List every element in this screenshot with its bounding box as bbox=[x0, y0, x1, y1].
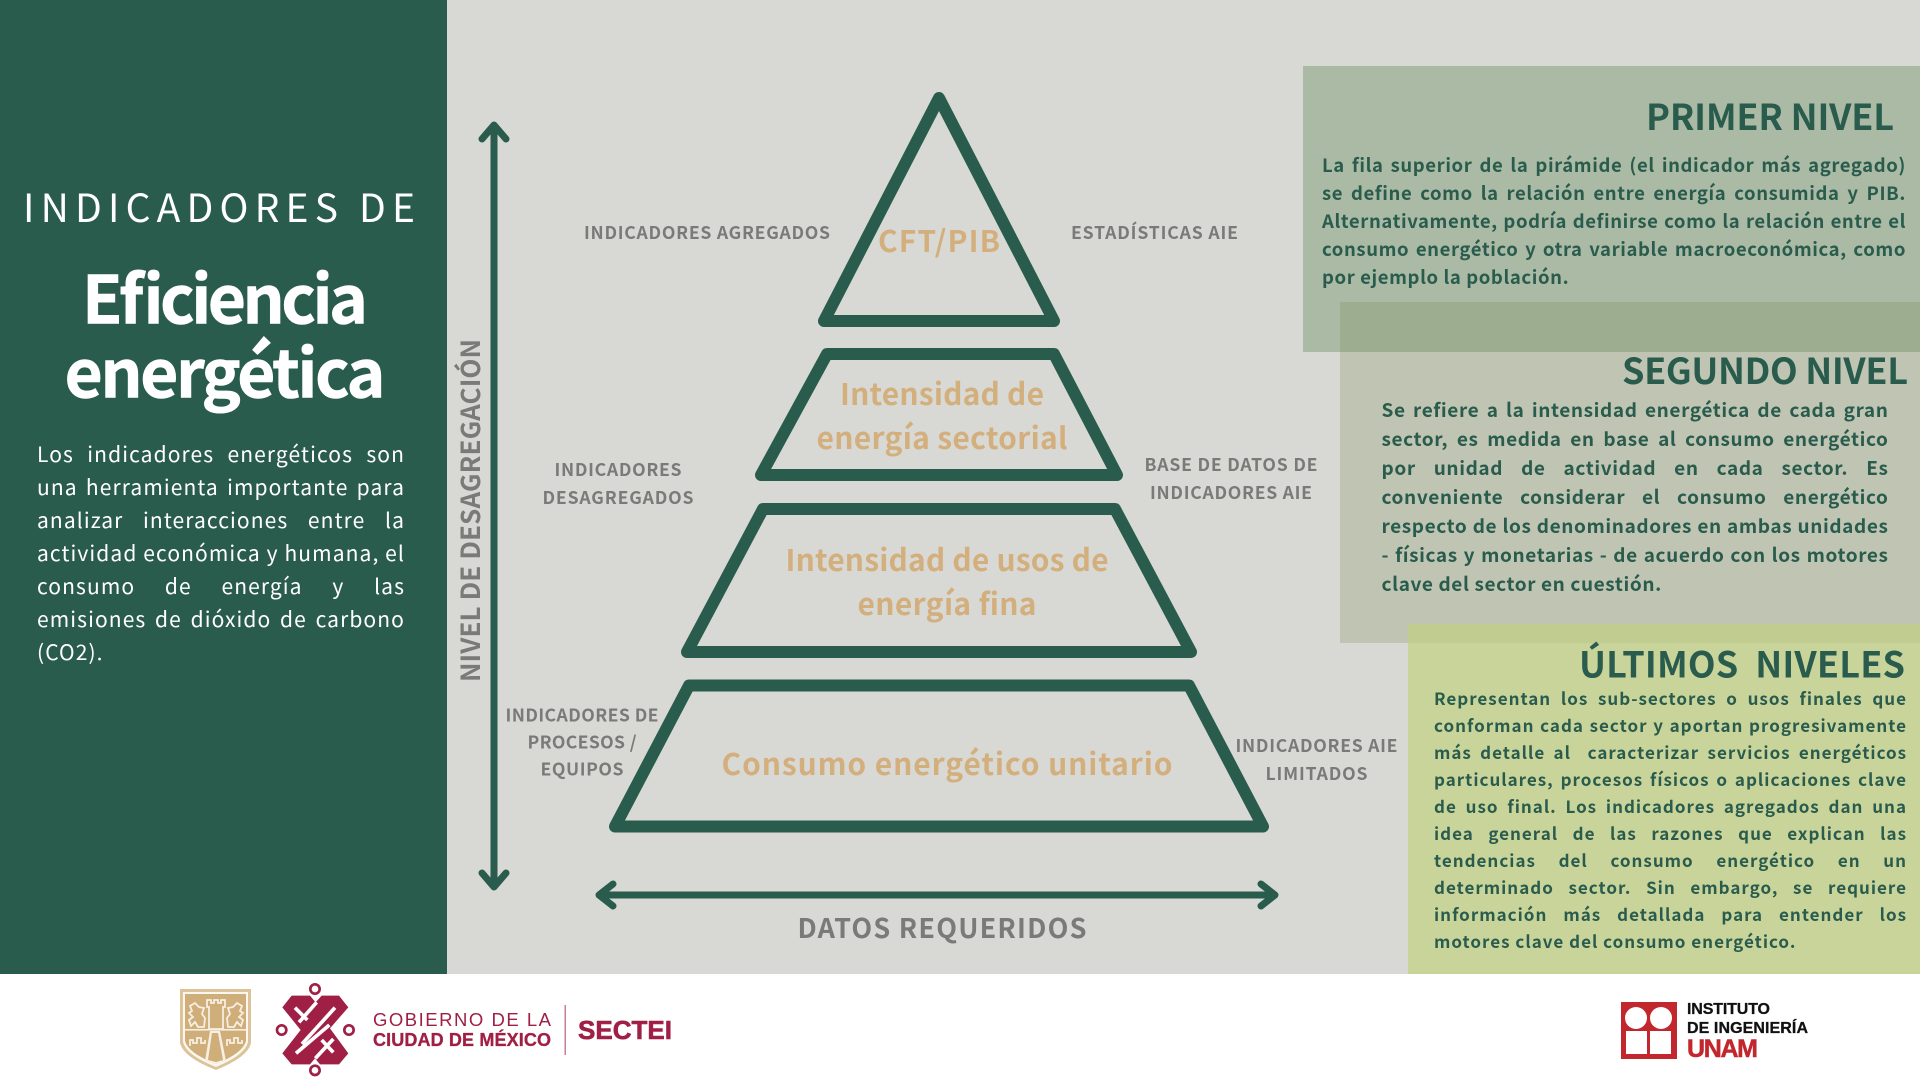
pyramid labels: CFT/PIB bbox=[878, 217, 1000, 261]
side labels: INDICADORES AIE bbox=[1150, 480, 1312, 505]
segundo nivel body text: clave del sector en cuestión. bbox=[1382, 570, 1662, 597]
segundo nivel body text: respecto de los denominadores en ambas unidades bbox=[1382, 512, 1888, 539]
primer nivel body text: por ejemplo la población. bbox=[1322, 264, 1569, 290]
arrow: nivel de desagregacion bbox=[482, 125, 506, 887]
side labels: LIMITADOS bbox=[1266, 761, 1368, 786]
logo text: instituto de ingenieria unam: UNAM bbox=[1687, 1035, 1758, 1063]
logo text: sectei: SECTEI bbox=[578, 1015, 672, 1045]
pyramid labels: Intensidad de usos de bbox=[786, 536, 1108, 580]
side labels: INDICADORES bbox=[554, 457, 682, 482]
pyramid labels: Intensidad de bbox=[840, 370, 1044, 414]
pyramid tier 4 bbox=[615, 686, 1263, 826]
ultimos niveles body text: idea general de las razones que explican las bbox=[1434, 820, 1907, 844]
ultimos niveles body text: particulares, procesos físicos o aplicaciones clave bbox=[1434, 766, 1907, 790]
heading: segundo nivel: SEGUNDO NIVEL bbox=[1622, 343, 1908, 395]
axis label: datos requeridos: DATOS REQUERIDOS bbox=[798, 907, 1086, 946]
side labels bbox=[506, 220, 1398, 786]
segundo nivel body text: conveniente considerar el consumo energético bbox=[1382, 483, 1888, 510]
ultimos niveles body text: más detalle al caracterizar servicios energéticos bbox=[1434, 738, 1907, 764]
primer nivel body text bbox=[1322, 152, 1906, 290]
left panel body text: una herramienta importante para bbox=[37, 472, 405, 502]
logo text: instituto de ingenieria unam bbox=[1687, 1001, 1808, 1063]
logo: cdmx emblem bbox=[277, 984, 354, 1075]
title: indicadores de: INDICADORES DE bbox=[23, 178, 415, 234]
arrow: datos requeridos bbox=[599, 884, 1275, 906]
side labels: EQUIPOS bbox=[540, 756, 624, 782]
segundo nivel body text: sector, es medida en base al consumo energético bbox=[1382, 425, 1888, 452]
title: eficiencia energetica: energética bbox=[64, 322, 386, 418]
segundo nivel body text bbox=[1382, 396, 1888, 597]
pyramid labels: energía fina bbox=[858, 580, 1036, 624]
logo text: gobierno de la ciudad de mexico: GOBIERNO DE LA bbox=[373, 1009, 552, 1030]
primer nivel body text: se define como la relación entre energía consumida y PIB. bbox=[1322, 180, 1906, 206]
left title panel bbox=[0, 0, 447, 974]
left panel body text: analizar interacciones entre la bbox=[37, 505, 405, 535]
logo divider bbox=[564, 1005, 566, 1055]
side labels: ESTADÍSTICAS AIE bbox=[1071, 220, 1238, 245]
ultimos niveles body text: determinado sector. Sin embargo, se requiere bbox=[1434, 874, 1907, 898]
heading: ultimos niveles: ÚLTIMOS NIVELES bbox=[1579, 636, 1905, 688]
logo text: gobierno de la ciudad de mexico: CIUDAD DE MÉXICO bbox=[373, 1029, 551, 1050]
side labels: INDICADORES AGREGADOS bbox=[584, 220, 830, 245]
segundo nivel body text: por unidad de actividad en cada sector. Es bbox=[1382, 454, 1888, 481]
primer nivel body text: consumo energético y otra variable macroeconómica, como bbox=[1322, 236, 1906, 262]
ultimos niveles body text: tendencias del consumo energético en un bbox=[1434, 846, 1907, 872]
side labels: PROCESOS / bbox=[528, 730, 637, 754]
logo text: gobierno de la ciudad de mexico bbox=[373, 1009, 552, 1050]
logo text: instituto de ingenieria unam: DE INGENIERÍA bbox=[1687, 1018, 1808, 1037]
panel: ultimos niveles bbox=[1408, 624, 1920, 974]
left panel body text: (CO2). bbox=[37, 637, 104, 667]
title: eficiencia energetica: Eficiencia bbox=[82, 248, 368, 344]
ultimos niveles body text bbox=[1434, 684, 1907, 952]
side labels: INDICADORES DE bbox=[506, 702, 658, 728]
left panel body text: Los indicadores energéticos son bbox=[37, 439, 405, 469]
ultimos niveles body text: información más detallada para entender los bbox=[1434, 900, 1907, 926]
primer nivel body text: La fila superior de la pirámide (el indicador más agregado) bbox=[1322, 152, 1906, 178]
panel: segundo nivel bbox=[1340, 302, 1920, 643]
pyramid labels: Consumo energético unitario bbox=[722, 740, 1172, 784]
segundo nivel body text: Se refiere a la intensidad energética de cada gran bbox=[1382, 396, 1888, 423]
left panel body text: emisiones de dióxido de carbono bbox=[37, 604, 405, 634]
pyramid labels bbox=[722, 217, 1172, 784]
ultimos niveles body text: Representan los sub-sectores o usos finales que bbox=[1434, 684, 1907, 710]
left panel body text: consumo de energía y las bbox=[37, 571, 405, 601]
pyramid tier 2 bbox=[761, 354, 1117, 475]
axis label: nivel de desagregacion: NIVEL DE DESAGREGACIÓN bbox=[451, 339, 488, 682]
primer nivel body text: Alternativamente, podría definirse como la relación entre el bbox=[1322, 208, 1906, 234]
side labels: BASE DE DATOS DE bbox=[1144, 452, 1318, 477]
title: eficiencia energetica bbox=[64, 248, 386, 418]
ultimos niveles body text: motores clave del consumo energético. bbox=[1434, 928, 1796, 952]
segundo nivel body text: - físicas y monetarias - de acuerdo con los motores bbox=[1382, 541, 1888, 568]
heading: primer nivel: PRIMER NIVEL bbox=[1646, 89, 1894, 141]
pyramid labels: energía sectorial bbox=[816, 414, 1068, 458]
side labels: DESAGREGADOS bbox=[542, 485, 694, 510]
logo text: instituto de ingenieria unam: INSTITUTO bbox=[1687, 1001, 1770, 1018]
panel: primer nivel bbox=[1303, 66, 1920, 352]
side labels: INDICADORES AIE bbox=[1236, 733, 1398, 758]
logo: shield bbox=[180, 989, 251, 1070]
ultimos niveles body text: de uso final. Los indicadores agregados dan una bbox=[1434, 792, 1907, 818]
left panel body text bbox=[37, 439, 405, 667]
pyramid tier 3 bbox=[687, 509, 1191, 652]
left panel body text: actividad económica y humana, el bbox=[37, 538, 405, 568]
logo: unam instituto de ingenieria mark bbox=[1621, 1002, 1677, 1059]
pyramid tier 1: triangle bbox=[824, 98, 1054, 321]
ultimos niveles body text: conforman cada sector y aportan progresivamente bbox=[1434, 712, 1907, 736]
